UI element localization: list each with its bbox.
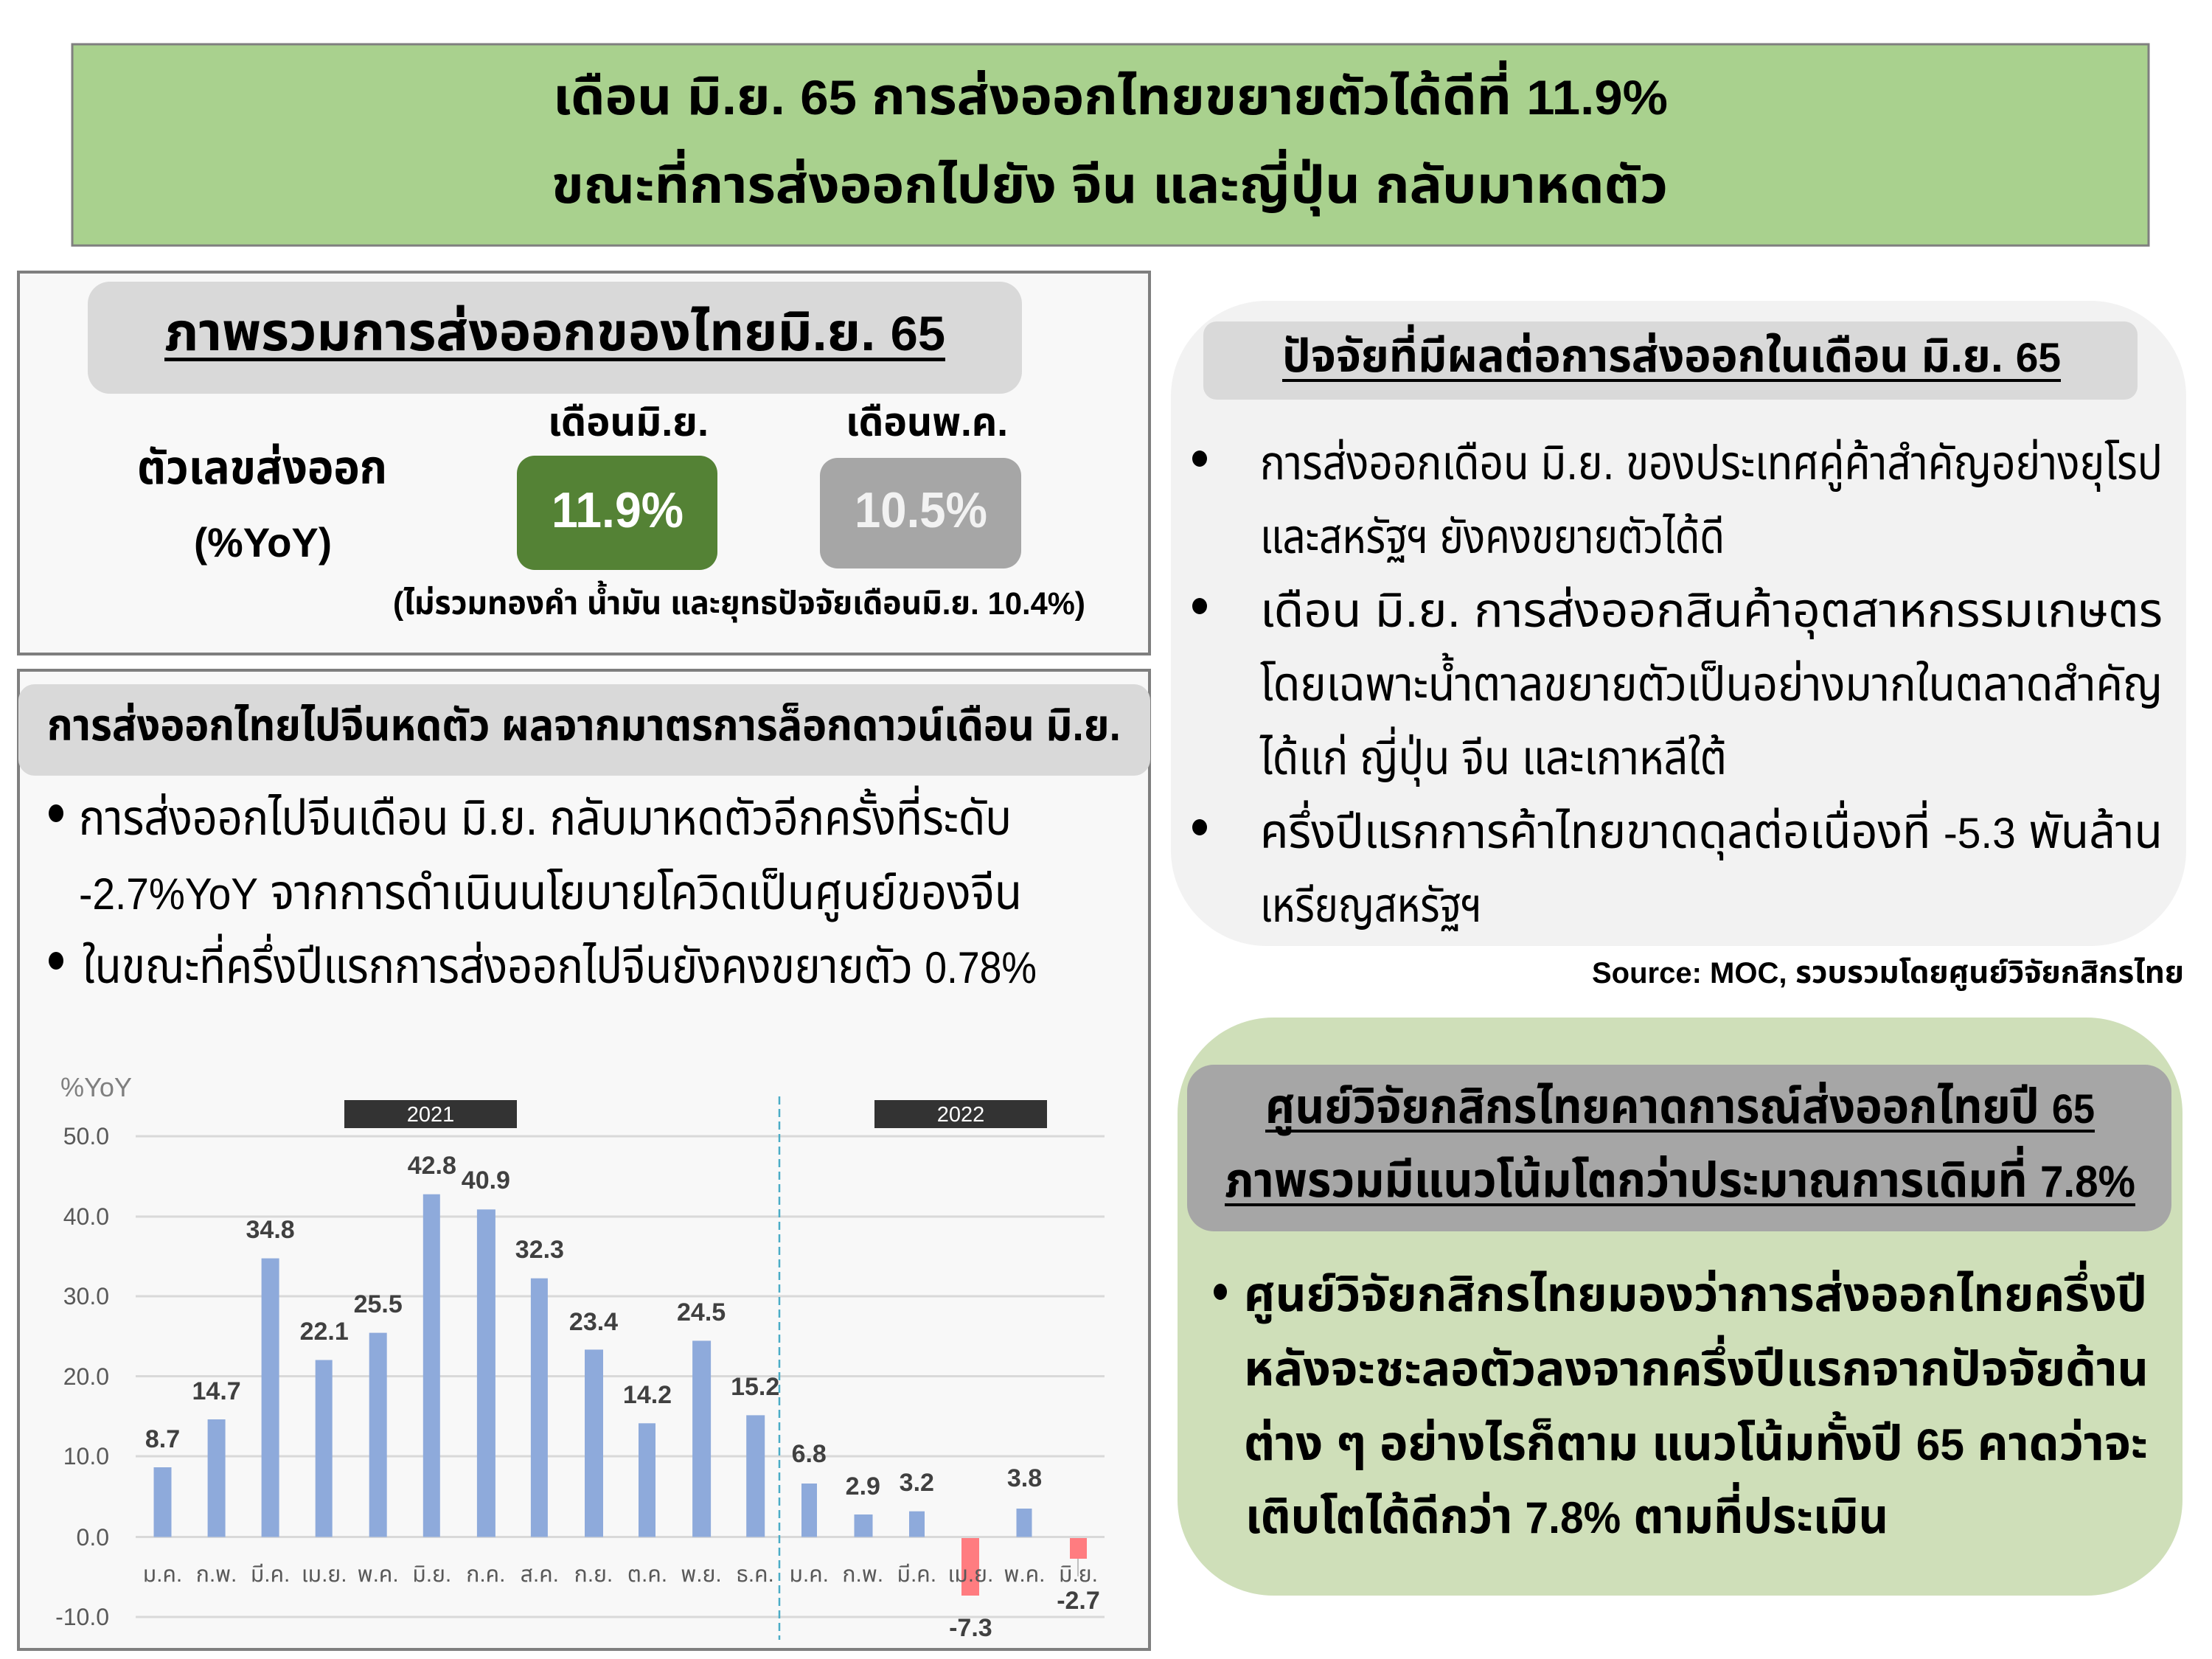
y axis labels: -10.0 [55,1604,109,1630]
overview heading: ภาพรวมการส่งออกของไทยมิ.ย. 65 [164,303,945,362]
month labels: พ.ย. [681,1562,722,1587]
y axis labels: 20.0 [63,1363,109,1390]
row label: export figure: ตัวเลขส่งออก [137,441,387,494]
y axis labels: 50.0 [63,1123,109,1150]
value labels: -7.3 [949,1614,992,1642]
value labels: 14.2 [623,1381,672,1409]
month labels: ต.ค. [627,1562,667,1587]
value labels: 22.1 [300,1318,349,1346]
forecast heading [1187,1065,2171,1231]
axis unit: %YoY [60,1072,132,1102]
month labels: ก.พ. [843,1562,883,1587]
factors bullet text: เดือน มิ.ย. การส่งออกสินค้าอุตสาหกรรมเกษตร [1260,584,2163,639]
factors bullet text: ครึ่งปีแรกการค้าไทยขาดดุลต่อเนื่องที่ -5.3 พันล้าน [1260,800,2163,860]
y axis labels: 10.0 [63,1443,109,1470]
month labels: พ.ค. [1004,1562,1045,1587]
title banner: เดือน มิ.ย. 65 การส่งออกไทยขยายตัวได้ดีที่ 11.9% [553,60,1668,125]
China bullet text: การส่งออกไปจีนเดือน มิ.ย. กลับมาหดตัวอีกครั้งที่ระดับ [79,785,1012,845]
source note: Source: MOC, รวบรวมโดยศูนย์วิจัยกสิกรไทย [1592,955,2184,991]
value labels: 23.4 [569,1308,618,1336]
value labels: 40.9 [462,1166,510,1194]
China bullet text: -2.7%YoY จากการดำเนินนโยบายโควิดเป็นศูนย์ของจีน [79,865,1022,922]
forecast bullet text: เติบโตได้ดีกว่า 7.8% ตามที่ประเมิน [1245,1482,1888,1543]
factors bullet text: ได้แก่ ญี่ปุ่น จีน และเกาหลีใต้ [1259,726,1727,787]
footnote: (ไม่รวมทองคำ น้ำมัน และยุทธปัจจัยเดือนมิ.ย. 10.4%) [393,580,1085,623]
month labels: ก.ย. [574,1562,613,1587]
month labels: มี.ค. [251,1562,290,1587]
month labels [143,1562,1098,1587]
value labels [145,1152,1100,1642]
panel: KResearch forecast [1178,1018,2183,1596]
panel: exports to China [18,670,1150,1649]
title banner: ขณะที่การส่งออกไปยัง จีน และญี่ปุ่น กลับมาหดตัว [552,149,1668,216]
month labels: ธ.ค. [736,1562,774,1587]
China heading: การส่งออกไทยไปจีนหดตัว ผลจากมาตรการล็อกดาวน์เดือน มิ.ย. [47,700,1121,750]
forecast bullet text: ศูนย์วิจัยกสิกรไทยมองว่าการส่งออกไทยครึ่งปี [1244,1260,2147,1324]
year tag 2022 [874,1100,1047,1128]
month labels: มี.ค. [897,1562,936,1587]
value labels: 8.7 [145,1425,180,1453]
forecast bullet text [1214,1260,2149,1543]
panel: factors affecting exports [1171,301,2186,946]
y axis labels: 30.0 [63,1283,109,1310]
value labels: -2.7 [1057,1587,1100,1615]
KPI: June [517,400,717,570]
China heading [18,684,1150,776]
KPI: June: 11.9% [552,482,684,538]
KPI: May: 10.5% [855,482,987,538]
month labels: ก.ค. [466,1562,505,1587]
factors bullet text: โดยเฉพาะน้ำตาลขยายตัวเป็นอย่างมากในตลาดสำคัญ [1260,653,2163,711]
year tag 2022: 2022 [937,1103,984,1127]
title banner [72,44,2149,246]
value labels: 2.9 [846,1472,880,1500]
row label: export figure [137,441,387,566]
forecast bullet text: ต่าง ๆ อย่างไรก็ตาม แนวโน้มทั้งปี 65 คาดว่าจะ [1244,1411,2148,1470]
year divider [779,1096,780,1640]
month labels: ก.พ. [196,1562,237,1587]
value labels: 3.8 [1007,1464,1042,1492]
value labels: 42.8 [408,1152,456,1180]
value labels: 25.5 [354,1290,403,1318]
y axis labels [55,1123,109,1630]
bars [153,1194,1087,1596]
bar chart [55,1072,1105,1642]
row label: export figure: (%YoY) [194,519,332,566]
China bullet text [49,785,1037,993]
value labels: 6.8 [792,1440,827,1468]
y axis labels: 0.0 [77,1524,109,1551]
y axis labels: 40.0 [63,1203,109,1230]
month labels: ส.ค. [521,1562,559,1587]
value labels: 14.7 [192,1377,241,1405]
KPI: May [820,400,1021,568]
month labels: มิ.ย. [412,1562,451,1587]
overview heading [88,282,1022,394]
year tag 2021 [344,1100,517,1128]
month labels: เม.ย. [302,1562,347,1587]
value labels: 34.8 [246,1216,295,1244]
China bullet text: ในขณะที่ครึ่งปีแรกการส่งออกไปจีนยังคงขยายตัว 0.78% [83,933,1037,993]
factors heading: ปัจจัยที่มีผลต่อการส่งออกในเดือน มิ.ย. 65 [1282,324,2061,382]
factors bullet text: และสหรัฐฯ ยังคงขยายตัวได้ดี [1260,510,1725,563]
forecast heading: ภาพรวมมีแนวโน้มโตกว่าประมาณการเดิมที่ 7.8% [1225,1146,2135,1207]
factors bullet text: เหรียญสหรัฐฯ [1260,879,1482,932]
value labels: 3.2 [900,1469,934,1497]
KPI: June: เดือนมิ.ย. [548,400,709,445]
panel: export overview [18,272,1150,654]
month labels: มิ.ย. [1059,1562,1098,1587]
forecast bullet text: หลังจะชะลอตัวลงจากครึ่งปีแรกจากปัจจัยด้าน [1244,1335,2149,1396]
month labels: พ.ค. [358,1562,399,1587]
factors heading [1203,321,2138,400]
factors bullet text [1192,437,2163,932]
value labels: 32.3 [515,1236,564,1264]
value labels: 24.5 [677,1298,726,1326]
month labels: ม.ค. [789,1562,829,1587]
value labels: 15.2 [731,1373,779,1401]
KPI: May: เดือนพ.ค. [846,400,1008,445]
month labels: ม.ค. [143,1562,182,1587]
year tag 2021: 2021 [407,1103,454,1127]
forecast heading: ศูนย์วิจัยกสิกรไทยคาดการณ์ส่งออกไทยปี 65 [1265,1079,2095,1135]
month labels: เม.ย. [948,1562,993,1587]
